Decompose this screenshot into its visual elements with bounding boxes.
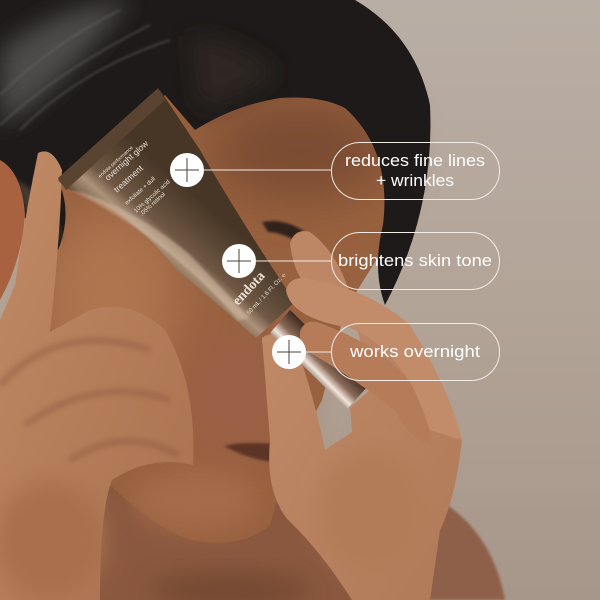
top finger xyxy=(290,231,352,302)
eyebrow xyxy=(262,221,305,242)
tube label small: .05% retinol xyxy=(139,192,167,217)
thumb and palm of right hand xyxy=(262,300,462,600)
tube label small xyxy=(97,138,288,316)
ear xyxy=(0,160,25,300)
lips xyxy=(224,443,275,462)
hair xyxy=(0,0,430,305)
left hand xyxy=(0,151,193,600)
tube label small: treatment xyxy=(112,163,145,194)
product tube xyxy=(58,88,295,338)
callout: works overnight xyxy=(272,324,500,380)
right hand fingers xyxy=(286,231,462,445)
tube cap xyxy=(270,310,368,409)
tube label small: exfoliate + dull xyxy=(124,176,157,206)
nostril xyxy=(141,445,165,461)
tube label small: overnight glow xyxy=(103,138,151,182)
tube highlight xyxy=(72,190,250,320)
tube label small: 50 mL / 1.6 Fl. Oz. ℮ xyxy=(246,272,288,316)
tube label small: 10% glycolic acid xyxy=(133,179,172,214)
tube label small: endota xyxy=(230,269,269,309)
tube crimp xyxy=(58,88,165,190)
callout: reduces fine lines: reduces fine lines xyxy=(345,151,485,170)
ring finger xyxy=(300,322,432,445)
tube label small: endota performance xyxy=(97,145,135,179)
hair sheen xyxy=(0,0,130,125)
callout: reduces fine lines xyxy=(170,142,500,200)
callout: brightens skin tone: brightens skin tone xyxy=(338,251,492,270)
middle finger xyxy=(286,278,462,440)
hair under tube xyxy=(15,180,62,240)
shoulder and neck xyxy=(85,460,505,600)
callout: works overnight: works overnight xyxy=(349,342,480,361)
callout: brightens skin tone xyxy=(222,232,500,290)
face xyxy=(30,50,400,543)
callout: reduces fine lines: + wrinkles xyxy=(376,171,454,190)
